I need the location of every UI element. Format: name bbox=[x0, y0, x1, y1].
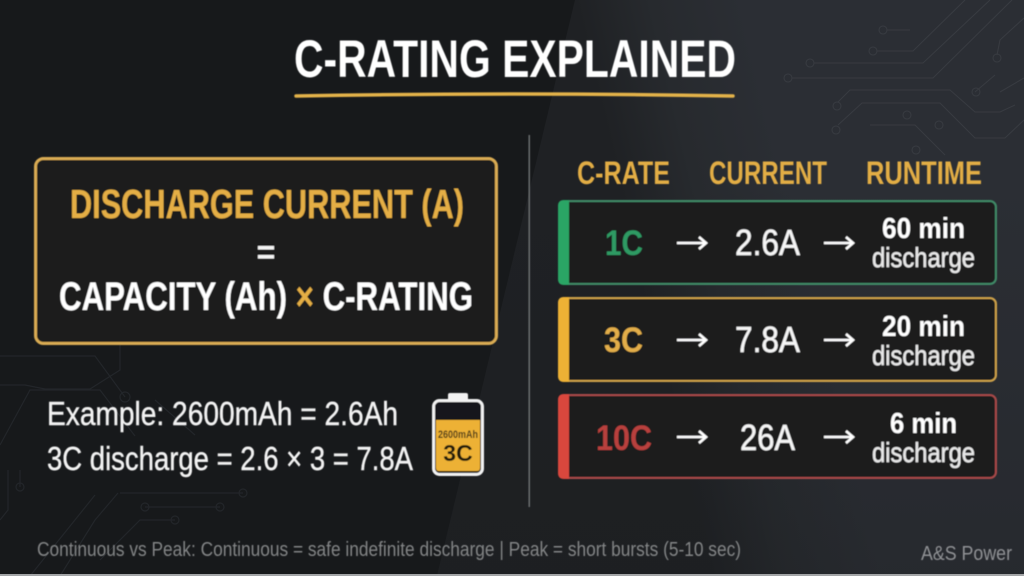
formula line: capacity times C-rating: CAPACITY (Ah) × C-RATING bbox=[59, 275, 473, 319]
title: C-RATING EXPLAINED bbox=[294, 30, 736, 89]
row: 10C: 10C bbox=[596, 419, 652, 458]
row: 10C: 6 min bbox=[890, 408, 957, 440]
row: 1C bbox=[558, 200, 996, 285]
example text: Example: 2600mAh = 2.6Ah bbox=[47, 395, 398, 432]
row: 1C: discharge bbox=[872, 242, 975, 273]
panel: formula bbox=[36, 158, 496, 344]
example text bbox=[47, 395, 413, 477]
row: 1C: 60 min bbox=[882, 213, 965, 245]
formula line: discharge current: DISCHARGE CURRENT (A) bbox=[70, 181, 464, 227]
row: 3C: 20 min bbox=[882, 311, 965, 343]
row: 10C bbox=[558, 394, 996, 479]
row: 1C: 1C bbox=[605, 224, 643, 263]
table headers bbox=[577, 155, 982, 191]
row: 1C: 2.6A bbox=[735, 222, 800, 263]
icon: battery bbox=[434, 393, 482, 474]
row: 3C: 7.8A bbox=[735, 319, 800, 360]
row: 3C bbox=[558, 297, 996, 382]
row: 10C: 26A bbox=[740, 417, 795, 458]
table headers: CURRENT bbox=[709, 155, 827, 191]
brand label: A&S Power bbox=[921, 543, 1012, 565]
table headers: C-RATE bbox=[577, 155, 670, 191]
row: 3C: 3C bbox=[604, 321, 643, 360]
row: 10C: discharge bbox=[872, 437, 975, 468]
formula equals sign: = bbox=[257, 234, 275, 270]
title underline bbox=[296, 94, 733, 96]
table headers: RUNTIME bbox=[866, 155, 982, 191]
center divider bbox=[528, 135, 530, 507]
example text: 3C discharge = 2.6 × 3 = 7.8A bbox=[47, 440, 413, 477]
icon: battery: 3C bbox=[443, 440, 473, 466]
footer note: Continuous vs Peak: Continuous = safe indefinite discharge | Peak = short bursts (5-10 sec) bbox=[37, 539, 741, 561]
row: 3C: discharge bbox=[872, 340, 975, 371]
icon: battery: 2600mAh bbox=[438, 429, 478, 441]
